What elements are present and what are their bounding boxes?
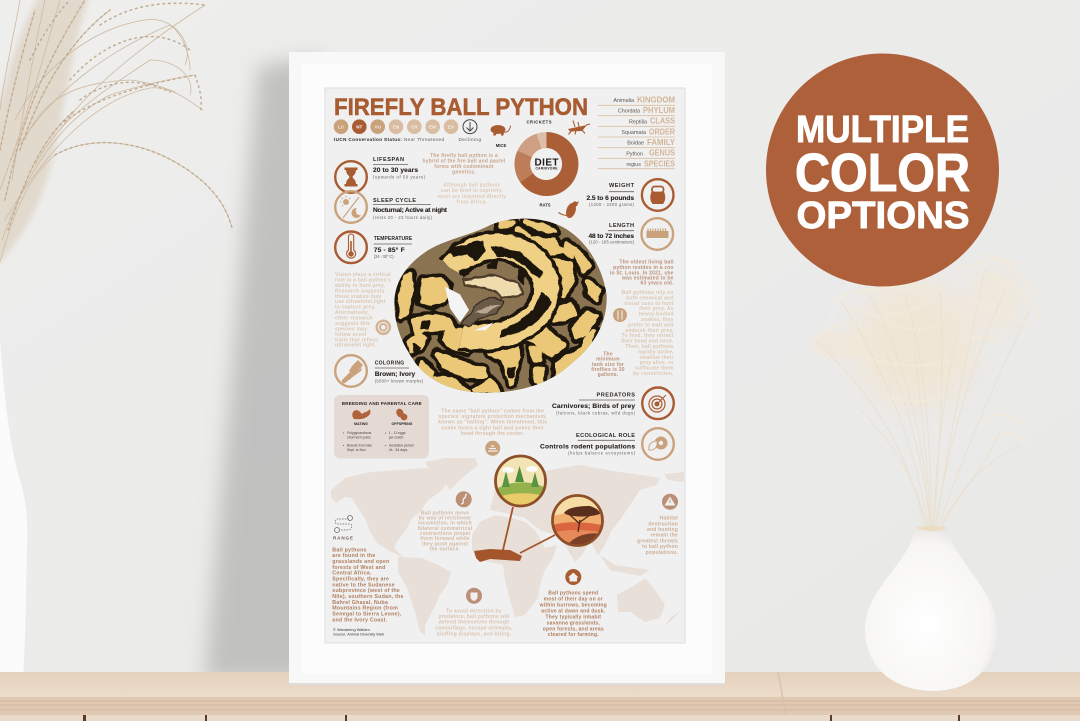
text: range description: grasslands and open: [332, 559, 389, 565]
text: habitat: most of their day on or: [544, 597, 603, 603]
diet labels: RATS: [539, 202, 551, 208]
white picture frame: [289, 52, 725, 685]
inner coil body: [452, 246, 546, 337]
conservation status badges: LC: [338, 124, 345, 129]
color options badge: OPTIONS: [796, 195, 970, 237]
text: locomotion: they push against: [422, 541, 468, 547]
text: vision: suggests this: [335, 321, 370, 327]
snake head: [461, 297, 503, 327]
text: defense: predators, ball pythons will: [439, 614, 510, 620]
diet donut chart: [514, 132, 578, 196]
text: habitat: They typically inhabit: [545, 614, 601, 620]
text: vision: role in a ball python's: [335, 277, 391, 283]
text: offspring bullets: 44 - 54 days: [389, 448, 408, 452]
icon: coiled snake: [485, 441, 500, 456]
icon: eggs: [395, 407, 407, 420]
text: mating bullets: short-term pairs: [347, 435, 371, 439]
text: threats: remain the: [650, 533, 678, 539]
ecological role block: [540, 428, 674, 460]
text: oldest snake: The oldest living ball: [619, 259, 674, 265]
text: vision: ultraviolet light.: [335, 343, 377, 349]
text: mating bullets: •: [343, 443, 345, 447]
text: tank size: The: [603, 352, 613, 358]
text: vision: to capture prey.: [335, 305, 376, 311]
length block: (120 - 185 centimeters): [589, 239, 635, 244]
text: tank size: minimum: [596, 357, 620, 363]
predators block: [552, 388, 674, 419]
temperature block: 75 - 85° F: [374, 246, 405, 254]
length block: [588, 218, 673, 250]
coloring block: [335, 355, 424, 387]
panel: breeding and parental care: BREEDING AND PARENTAL CARE: [342, 401, 422, 406]
left white vase: [0, 340, 27, 688]
text: threats: destruction: [648, 521, 678, 527]
conservation status badges: EN: [393, 124, 400, 129]
text: defense: bluffing displays, and biting.: [437, 631, 512, 637]
text: locomotion: locomotion, in which: [418, 521, 472, 527]
predators block: (falcons, black cobras, wild dogs): [556, 410, 636, 415]
temperature block: (24 - 30° C): [374, 254, 394, 259]
text: vision: follow scent: [335, 332, 367, 338]
text: name origin: The name "ball python" comes from the: [441, 409, 544, 415]
conservation status badges: [334, 119, 458, 134]
credits: © Wandering Walden: [333, 627, 370, 632]
text: hunting: both chemical and: [626, 295, 674, 301]
taxonomy list: Python: [626, 151, 643, 157]
taxonomy list: Chordata: [618, 109, 640, 115]
diet labels: [496, 120, 552, 208]
text: mating bullets: •: [343, 431, 345, 435]
icon: hourglass: [344, 168, 358, 186]
text: name origin: snake forms a tight ball and pokes their: [441, 425, 544, 431]
icon: leaf and gear: [649, 436, 668, 450]
text: habitat: open forests, and areas: [543, 626, 604, 632]
text: tank size: fireflies is 30: [591, 367, 625, 373]
text: locomotion: Ball pythons move: [421, 510, 469, 516]
text: vision: use ultraviolet light: [335, 299, 386, 305]
right white vase: [865, 525, 997, 691]
taxonomy list: Reptilia: [629, 119, 647, 125]
color options badge: COLOR: [795, 143, 970, 203]
icon: mouse: [490, 125, 510, 136]
text: locomotion: bilateral symmetrical: [418, 526, 473, 532]
label: range: RANGE: [333, 536, 353, 541]
color options badge: [766, 54, 999, 286]
text: defense: To avoid detection by: [446, 608, 502, 614]
taxonomy list: GENUS: [649, 149, 675, 158]
text: range description: Senegal to Sierra Leone),: [332, 612, 402, 618]
text: range description: Central Africa.: [332, 571, 372, 577]
conservation status badges: EX: [448, 124, 455, 129]
text: oldest snake: python resides in a zoo: [613, 265, 674, 271]
conservation status badges: EW: [429, 124, 437, 129]
weight block: (1200 - 2200 grams): [589, 202, 635, 207]
sleep cycle block: Nocturnal; Active at night: [373, 207, 448, 214]
predators block: Carnivores; Birds of prey: [552, 403, 635, 410]
icon: sun and moon: [340, 196, 361, 218]
taxonomy list: regius: [626, 162, 641, 168]
text: vision: trails that reflect: [335, 337, 378, 343]
conservation status text: IUCN Conservation Status: Near Threatened: [334, 137, 444, 142]
text: habitat: within burrows, becoming: [539, 603, 607, 609]
text: defense: defend themselves through: [439, 619, 509, 625]
ecological role block: ECOLOGICAL ROLE: [576, 433, 635, 439]
weight block: 2.5 to 6 pounds: [586, 195, 634, 202]
text: offspring bullets: •: [385, 443, 387, 447]
sleep cycle block: [335, 191, 448, 223]
coloring block: (5000+ known morphs): [375, 378, 424, 383]
text: range description: Specifically, they are: [332, 576, 389, 582]
lifespan block: 20 to 30 years: [373, 167, 418, 174]
text: range description: Ball pythons: [332, 547, 367, 553]
conservation status badges: NT: [356, 124, 363, 129]
temperature block: [335, 232, 413, 263]
text: captivity: Although ball pythons: [443, 183, 501, 189]
text: hunting: suffocate them: [635, 366, 674, 372]
frame cast shadow: [205, 56, 320, 680]
snake photograph illustration: [394, 218, 607, 393]
icon: eye ring: [376, 320, 391, 335]
weight block: WEIGHT: [609, 183, 635, 189]
text: range description: Bahrel Ghazal, Nuba: [332, 600, 388, 606]
text: vision: ability to hunt prey.: [335, 283, 386, 289]
icon: slithering snake: [456, 491, 472, 507]
text: locomotion: them forward while: [420, 536, 470, 542]
taxonomy list: SPECIES: [644, 159, 675, 168]
coloring block: COLORING: [375, 360, 404, 366]
text: mating bullets: Breeds from late: [347, 443, 372, 447]
taxonomy list: Squamata: [621, 130, 646, 136]
text: locomotion: contractions propel: [420, 531, 471, 537]
icon: rat: [558, 201, 579, 219]
text: hunting: prefer to wait and: [628, 322, 674, 328]
taxonomy list: CLASS: [650, 117, 675, 126]
predators block: PREDATORS: [596, 392, 635, 398]
text: hunting: Ball pythons rely on: [622, 290, 674, 296]
length block: 48 to 72 inches: [588, 233, 634, 240]
text: habitat: cleared for farming.: [548, 632, 599, 638]
taxonomy list: [598, 95, 676, 169]
icon: declining arrow: [463, 120, 477, 134]
text: locomotion: the surface.: [430, 546, 461, 552]
dried pampas grass, upper left: [0, 0, 232, 262]
credits: Source: Animal Diversity Web: [333, 631, 384, 636]
panel: breeding and parental care: [334, 395, 429, 458]
center opening: [445, 287, 469, 322]
lifespan block: LIFESPAN: [373, 157, 404, 163]
text: hybrid intro: hybrid of the fire ball and pastel: [422, 158, 506, 164]
coloring block: Brown; Ivory: [375, 371, 416, 378]
text: range description: are found in the: [332, 553, 376, 559]
text: oldest snake: in St. Louis. In 2021, she: [610, 270, 674, 276]
text: hunting: ambush their prey.: [625, 328, 674, 334]
text: oldest snake: was estimated to be: [621, 276, 674, 282]
sleep cycle block: (rests 20 - 23 hours daily): [373, 215, 433, 220]
text: tank size: tank size for: [592, 362, 624, 368]
weight block: [586, 179, 674, 211]
text: range description: forests of West and: [332, 565, 386, 571]
text: range description: native to the Sudanese: [332, 582, 395, 588]
range region on Africa: [474, 549, 522, 562]
diet labels: CRICKETS: [526, 120, 552, 125]
text: vision: Vision plays a critical: [335, 272, 391, 278]
text: threats: to ball python: [642, 544, 678, 550]
text: hunting: heavy-bodied: [639, 312, 674, 318]
text: name origin: species' signature protection mechanism,: [439, 414, 547, 420]
text: captivity: from Africa.: [457, 200, 488, 206]
cream band: [463, 275, 522, 299]
icon: kettlebell: [650, 186, 665, 204]
conservation status badges: CR: [411, 124, 418, 129]
text: name origin: head through the center.: [461, 431, 525, 437]
diet donut chart: DIET: [534, 157, 558, 168]
text: offspring bullets: per clutch: [389, 435, 404, 439]
icon: savanna habitat: [550, 496, 606, 550]
wooden shelf: [0, 672, 1080, 721]
text: threats: and hunting: [647, 527, 678, 533]
taxonomy list: ORDER: [649, 127, 675, 136]
color options badge: MULTIPLE: [796, 109, 969, 151]
text: hunting: by constriction.: [633, 371, 674, 377]
taxonomy list: Boidae: [627, 141, 644, 147]
icon: paint brush: [342, 360, 363, 383]
callout lines: [503, 507, 555, 553]
text: range description: subprovince (west of the: [332, 588, 400, 594]
text: vision: Research suggests: [335, 288, 385, 294]
icon: target: [649, 395, 666, 412]
text: oldest snake: 63 years old.: [641, 281, 674, 287]
icon: home: [565, 569, 581, 585]
title: FIREFLY BALL PYTHON: [334, 94, 588, 121]
ecological role block: (helps balance ecosystems): [568, 450, 636, 456]
icon: warning: [662, 494, 678, 510]
text: threats: greatest threats: [637, 538, 678, 544]
ecological role block: Controls rodent populations: [540, 443, 635, 450]
text: hybrid intro: genetics.: [452, 170, 476, 176]
text: captivity: most are imported directly: [438, 194, 506, 200]
text: offspring bullets: •: [385, 431, 387, 435]
taxonomy list: FAMILY: [647, 138, 676, 147]
dried flower bouquet: [812, 255, 1040, 527]
icon: mating snakes: [352, 409, 370, 419]
text: habitat: Ball pythons spend: [548, 591, 598, 597]
text: hunting: snakes, they: [641, 317, 674, 323]
text: mating bullets: Polygynandrous: [347, 431, 372, 435]
text: hunting: visual cues to hunt: [624, 301, 674, 307]
temperature block: TEMPERATURE: [374, 236, 413, 242]
icon: thermometer: [347, 234, 356, 258]
text: hunting: rapidly strike,: [638, 349, 674, 355]
text: threats: Habitat: [660, 515, 678, 521]
icon: range route: [334, 516, 352, 532]
panel: breeding and parental care: MATING: [354, 422, 368, 426]
diet labels: MICE: [496, 143, 506, 148]
text: offspring bullets: 1 - 11 eggs: [389, 431, 406, 435]
text: hunting: their prey. As: [639, 306, 674, 312]
text: locomotion: by way of rectilinear: [419, 516, 471, 522]
length block: LENGTH: [609, 223, 634, 229]
text: threats: populations.: [646, 550, 678, 556]
conservation status text: Declining: [458, 137, 481, 142]
diet donut chart: CARNIVORE: [536, 167, 558, 171]
icon: grassland habitat: [495, 456, 546, 510]
text: habitat: savanna grasslands,: [547, 620, 600, 626]
text: vision: species may: [335, 326, 367, 332]
text: vision: Alternatively,: [335, 310, 370, 316]
text: range description: and the Ivory Coast.: [332, 617, 388, 623]
text: vision: these snakes may: [335, 294, 381, 300]
text: hunting: To feed, they retract: [622, 333, 674, 339]
text: hunting: swallow their: [639, 355, 674, 361]
conservation status badges: VU: [375, 124, 382, 129]
text: hunting: their head and neck.: [621, 339, 674, 345]
panel: breeding and parental care: OFFSPRING: [392, 422, 413, 426]
text: captivity: can be bred in captivity,: [441, 188, 503, 194]
outer coil pattern: [400, 222, 600, 392]
icon: defense shield: [466, 588, 482, 604]
text: hybrid intro: The firefly ball python is a: [430, 153, 498, 159]
text: mating bullets: Sept. to Nov.: [347, 448, 366, 452]
taxonomy list: KINGDOM: [637, 95, 675, 104]
icon: ruler: [646, 228, 668, 238]
taxonomy list: PHYLUM: [643, 106, 675, 115]
sleep cycle block: SLEEP CYCLE: [373, 198, 416, 204]
text: habitat: active at dawn and dusk.: [541, 608, 606, 614]
lifespan block: [335, 157, 426, 193]
icon: fork and knife: [613, 308, 627, 322]
text: name origin: known as "balling". When threatened, this: [438, 420, 547, 426]
text: range description: Mountains Region (from: [332, 606, 398, 612]
icon: cricket: [568, 120, 590, 134]
dark saddles on inner coil: [413, 241, 551, 377]
world map background: [331, 458, 684, 635]
text: range description: Nile), southern Sudan, the: [332, 594, 404, 600]
text: hunting: Then, ball pythons: [626, 344, 674, 350]
text: defense: camouflage, escape attempts,: [435, 626, 513, 632]
text: tank size: gallons.: [598, 372, 619, 378]
text: offspring bullets: Gestation period: [389, 443, 414, 447]
text: hunting: prey alive, or: [640, 360, 674, 366]
poster sheet: [325, 88, 685, 643]
lifespan block: (upwards of 50 years): [373, 174, 426, 179]
text: hybrid intro: forms with codominant: [434, 164, 494, 170]
taxonomy list: Animalia: [613, 98, 634, 104]
text: vision: other research: [335, 316, 373, 322]
